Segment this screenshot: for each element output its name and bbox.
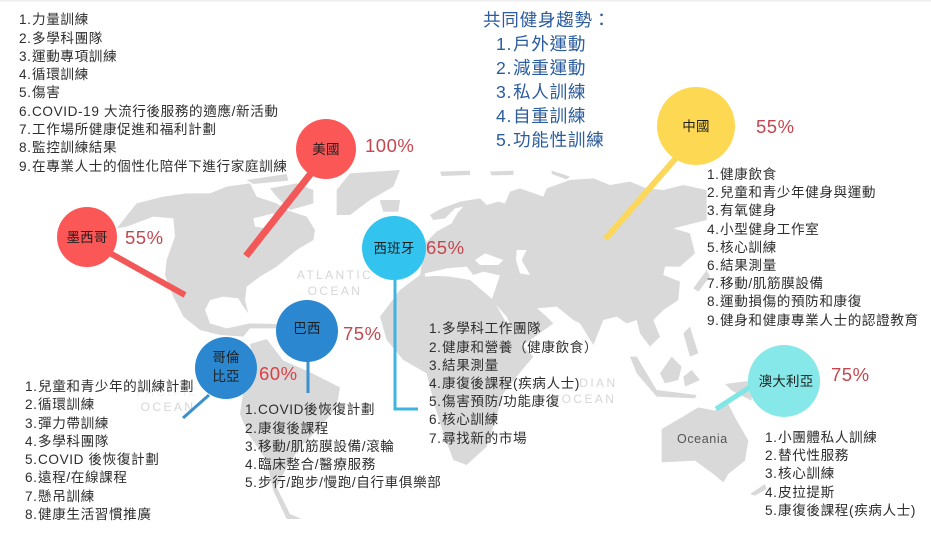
list: China: 健康飲食 (720, 166, 777, 182)
list: Australia: 5. (765, 503, 778, 518)
bubble: Mexico: 墨西哥 (66, 230, 108, 245)
list: USA: 傷害 (32, 85, 60, 100)
connector: Brazil (306, 360, 310, 393)
list: Colombia: 健康生活習慣推廣 (38, 506, 152, 522)
list: Australia: 2. (765, 448, 778, 463)
list: USA: 多學科團隊 (32, 31, 103, 46)
list: USA: 力量訓練 (32, 12, 89, 27)
list: Australia: 康復後課程(疾病人士) (778, 502, 916, 518)
bubble: Mexico (57, 207, 117, 267)
bubble: Australia: 澳大利亞 (759, 374, 813, 389)
bubble: Brazil (276, 300, 338, 362)
list: China: 1. (707, 167, 720, 182)
bubble: USA (296, 119, 356, 179)
list: Spain: 4. (429, 376, 442, 391)
list: China: 小型健身工作室 (720, 221, 819, 237)
ocean labels: OCEAN (562, 392, 616, 406)
list: Colombia: 兒童和青少年的訓練計劃 (38, 378, 194, 394)
list: Australia: 皮拉提斯 (778, 485, 835, 500)
list: Brazil: 5. (245, 475, 258, 490)
list: China: 核心訓練 (720, 240, 777, 255)
bubble: Australia (748, 345, 820, 417)
list: USA: 循環訓練 (32, 67, 89, 82)
list: USA: 3. (19, 49, 32, 64)
ocean labels: OCEAN (308, 284, 362, 298)
list: Spain: 健康和營養（健康飲食） (442, 339, 598, 355)
list: Brazil: 步行/跑步/慢跑/自行車俱樂部 (258, 474, 441, 490)
heading and list: common trends (483, 10, 611, 150)
bubble: Spain (362, 216, 426, 280)
list: China: 5. (707, 240, 720, 255)
list: Colombia: 2. (25, 397, 38, 412)
bubble: China (657, 87, 735, 165)
list: Australia: 1. (765, 430, 778, 445)
list: Colombia: 彈力帶訓練 (38, 416, 109, 431)
list: USA: COVID-19 大流行後服務的適應/新活動 (32, 103, 279, 119)
list: Spain: 多學科工作團隊 (442, 321, 541, 336)
heading and list: common trends: 5. (496, 130, 512, 150)
list: Colombia: 3. (25, 416, 38, 431)
list: Australia (765, 430, 916, 518)
list: USA: 6. (19, 104, 32, 119)
list: China: 9. (707, 313, 720, 328)
ocean labels: INDIAN (562, 376, 618, 390)
bubble: Spain: 西班牙 (373, 241, 415, 256)
list: USA: 監控訓練結果 (32, 140, 117, 155)
label: Oceania: Oceania (677, 432, 728, 446)
list: Brazil: 臨床整合/醫療服務 (258, 456, 376, 472)
list: Spain (429, 321, 598, 446)
ocean labels: OCEAN (141, 400, 195, 414)
list: USA: 在專業人士的個性化陪伴下進行家庭訓練 (32, 158, 288, 174)
list: Colombia: 7. (25, 489, 38, 504)
heading and list: common trends: 4. (496, 106, 512, 126)
list: China: 健身和健康專業人士的認證教育 (720, 312, 919, 328)
list: Colombia (25, 378, 194, 522)
list: Spain: 1. (429, 321, 442, 336)
list: Brazil: COVID後恢復計劃 (258, 401, 375, 417)
list: Australia: 小團體私人訓練 (778, 430, 877, 445)
heading and list: common trends: 功能性訓練 (513, 130, 604, 150)
list: Australia: 4. (765, 485, 778, 500)
list: China: 2. (707, 185, 720, 200)
list: China: 4. (707, 222, 720, 237)
bubble: Colombia: 比亞 (212, 369, 240, 384)
connector: Mexico (108, 252, 185, 295)
list: China: 結果測量 (720, 258, 777, 273)
list: USA: 9. (19, 159, 32, 174)
list: Brazil: 康復後課程 (258, 420, 329, 436)
list: USA: 1. (19, 12, 32, 27)
connector: Colombia (183, 395, 209, 418)
list: Australia: 3. (765, 466, 778, 481)
list: Australia: 替代性服務 (778, 448, 849, 463)
heading and list: common trends: 減重運動 (513, 58, 586, 78)
list: USA: 4. (19, 67, 32, 82)
bubble: China: 中國 (682, 119, 710, 134)
list: Colombia: 6. (25, 470, 38, 485)
list: USA: 2. (19, 31, 32, 46)
bubble: Brazil: 巴西 (293, 321, 321, 336)
list: China: 8. (707, 294, 720, 309)
heading and list: common trends: 私人訓練 (513, 82, 586, 102)
list: Brazil (245, 401, 441, 490)
list: China (707, 166, 919, 328)
list: Brazil: 2. (245, 421, 258, 436)
list: China: 6. (707, 258, 720, 273)
list: Spain: 核心訓練 (442, 412, 499, 427)
connector: Spain (395, 278, 418, 409)
list: Spain: 康復後課程(疾病人士) (442, 375, 580, 391)
ocean labels (136, 268, 618, 414)
percent: Colombia: 60% (259, 363, 298, 384)
list: Brazil: 移動/肌筋膜設備/滾輪 (258, 438, 394, 454)
heading and list: common trends: 共同健身趨勢： (483, 10, 611, 30)
connector: China (607, 158, 676, 237)
heading and list: common trends: 自重訓練 (513, 106, 586, 126)
percent: Spain: 65% (426, 237, 465, 258)
list: Spain: 結果測量 (442, 358, 499, 373)
list: USA: 7. (19, 122, 32, 137)
list: Spain: 6. (429, 412, 442, 427)
list: USA: 5. (19, 85, 32, 100)
list: USA: 8. (19, 140, 32, 155)
list: Colombia: 懸吊訓練 (38, 489, 95, 504)
heading and list: common trends: 戶外運動 (513, 34, 586, 54)
percent: Australia: 75% (831, 364, 870, 385)
list: Colombia: 多學科團隊 (38, 434, 109, 449)
list: China: 運動損傷的預防和康復 (720, 293, 862, 309)
list: Spain: 傷害預防/功能康復 (442, 393, 560, 409)
list: China: 3. (707, 203, 720, 218)
list: Spain: 3. (429, 358, 442, 373)
list: Colombia: 循環訓練 (38, 397, 95, 412)
list: USA: 工作場所健康促進和福利計劃 (32, 121, 217, 137)
list: Colombia: 8. (25, 507, 38, 522)
list: Brazil: 4. (245, 457, 258, 472)
percent: Brazil: 75% (343, 323, 382, 344)
bubble: Colombia (195, 337, 257, 399)
list: Spain: 7. (429, 431, 442, 446)
list: Spain: 5. (429, 394, 442, 409)
list: China: 移動/肌筋膜設備 (720, 275, 824, 291)
list: Colombia: COVID 後恢復計劃 (38, 451, 159, 467)
heading and list: common trends: 1. (496, 34, 512, 54)
list: Colombia: 5. (25, 452, 38, 467)
ocean labels: ATLANTIC (297, 268, 373, 282)
list: Colombia: 遠程/在線課程 (38, 470, 128, 485)
list: Brazil: 1. (245, 402, 258, 417)
heading and list: common trends: 2. (496, 58, 512, 78)
list: China: 兒童和青少年健身與運動 (720, 184, 876, 200)
bubble: USA: 美國 (312, 142, 340, 157)
list: Colombia: 1. (25, 379, 38, 394)
connector: USA (246, 172, 312, 256)
world map (117, 170, 767, 519)
bubble: Colombia: 哥倫 (212, 350, 240, 365)
list: USA: 運動專項訓練 (32, 49, 117, 64)
list: China: 7. (707, 276, 720, 291)
heading and list: common trends: 3. (496, 82, 512, 102)
list: Spain: 尋找新的市場 (442, 430, 527, 446)
list: Spain: 2. (429, 340, 442, 355)
list: China: 有氧健身 (720, 203, 777, 218)
list: Australia: 核心訓練 (778, 466, 835, 481)
percent: USA: 100% (365, 135, 414, 156)
list: Colombia: 4. (25, 434, 38, 449)
percent: Mexico: 55% (125, 227, 164, 248)
list: Brazil: 3. (245, 439, 258, 454)
ocean labels: PACIFIC (136, 385, 200, 399)
list: USA (19, 12, 288, 174)
percent: China: 55% (756, 116, 795, 137)
connector: Australia (716, 382, 758, 409)
